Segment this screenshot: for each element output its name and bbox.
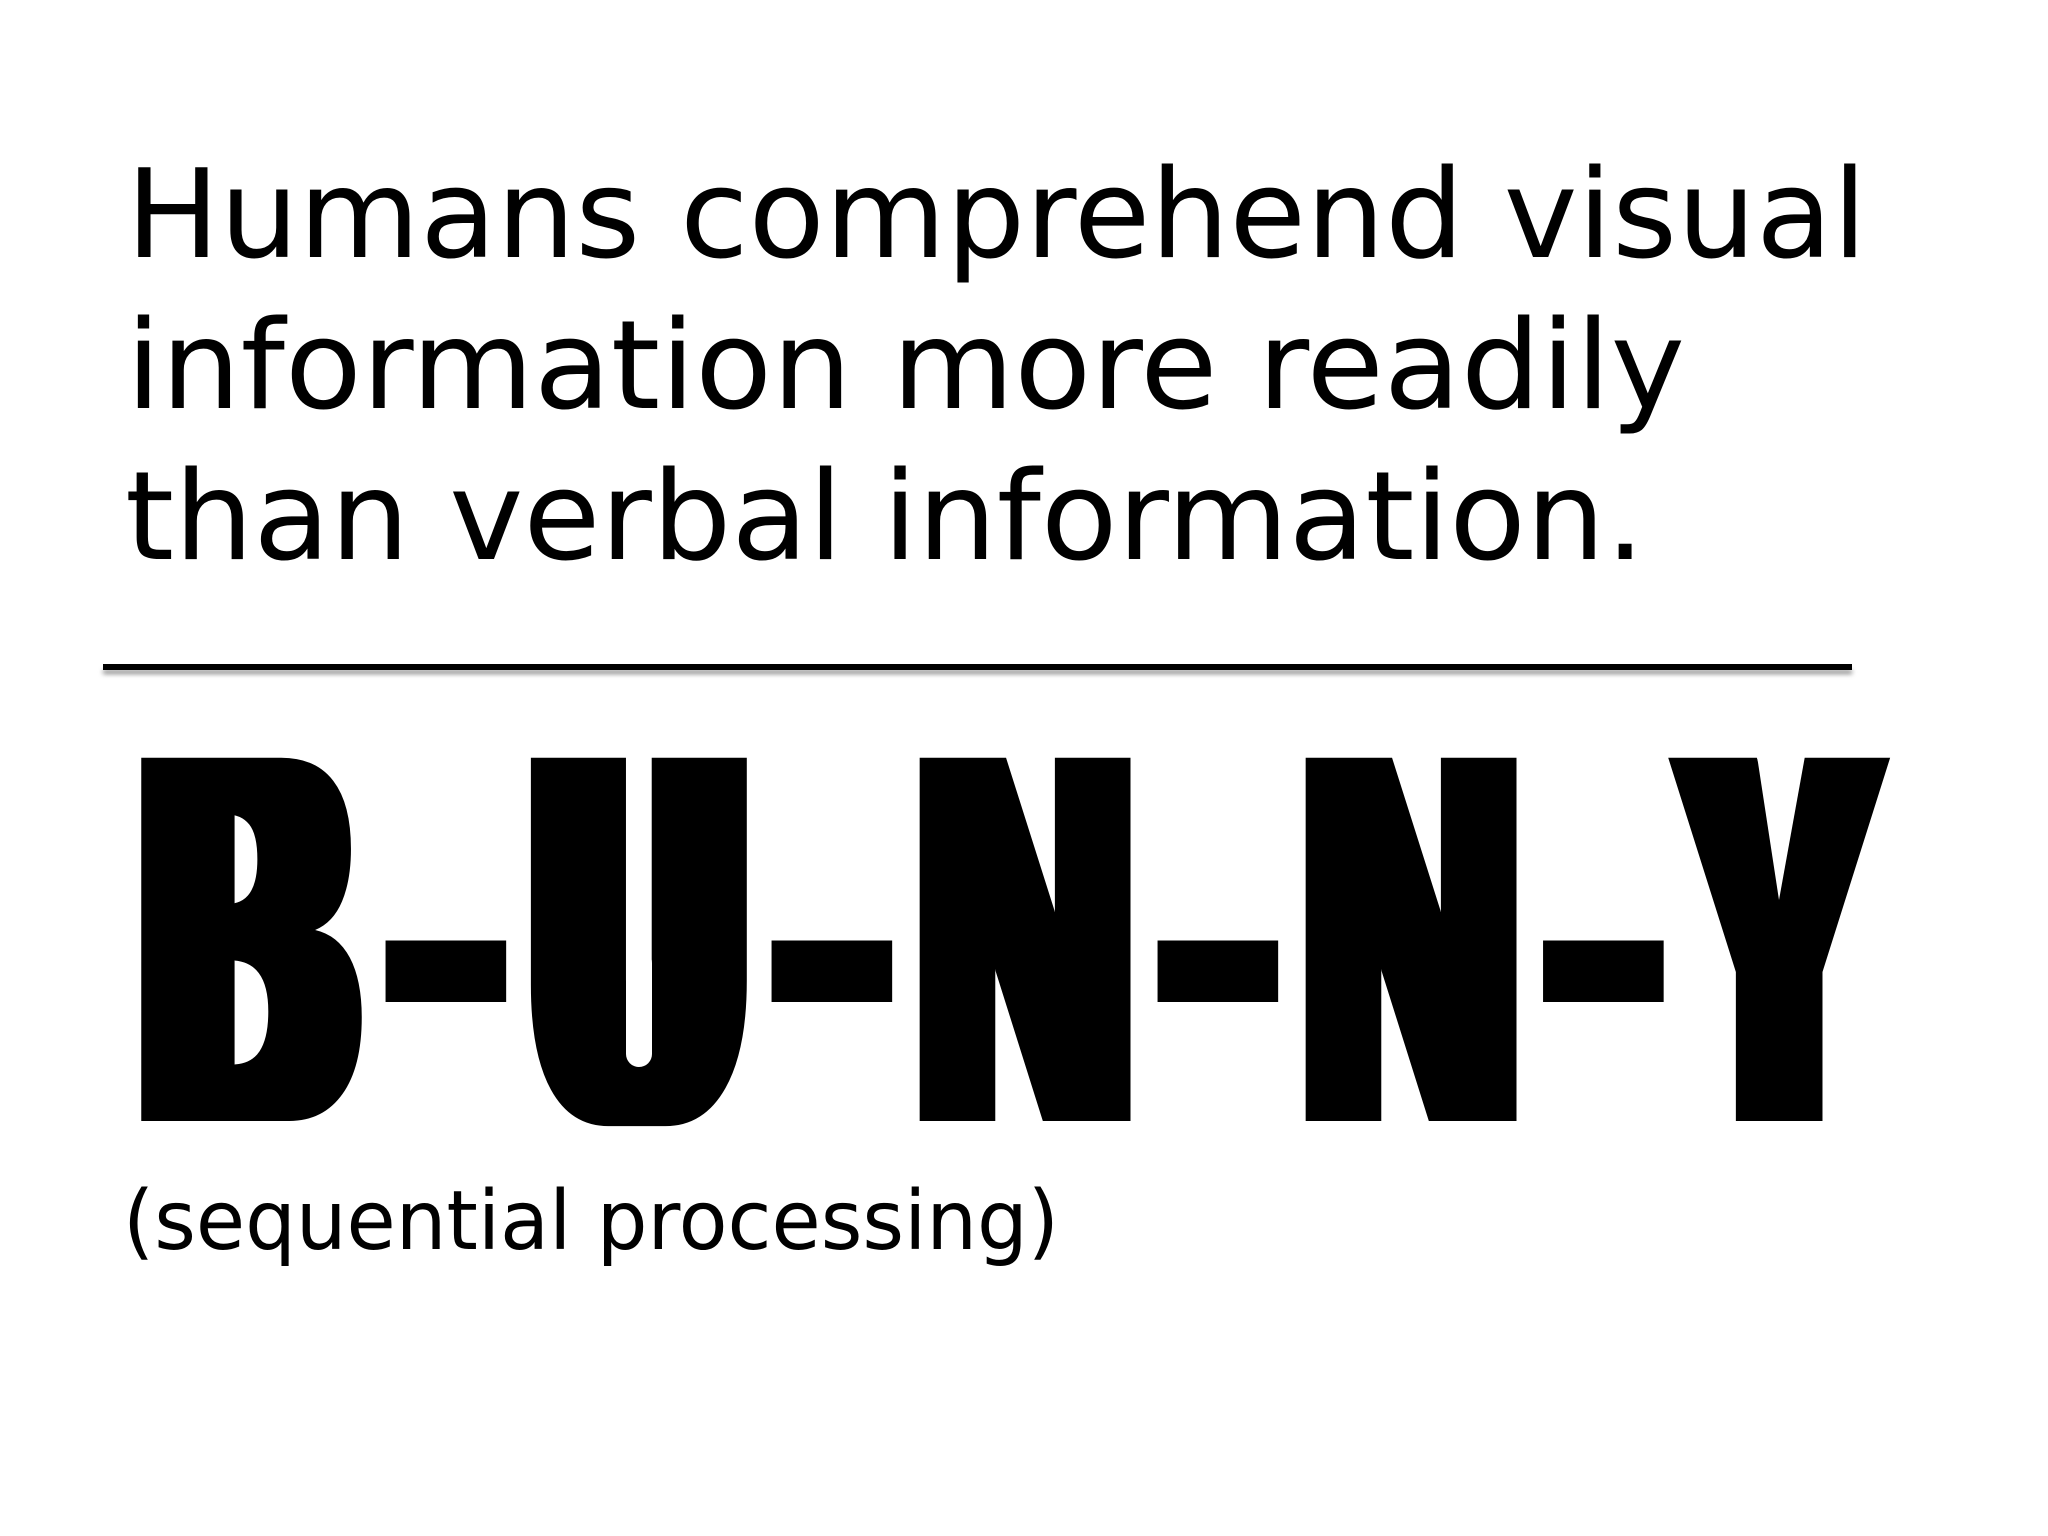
hyphen 2: - bbox=[753, 639, 911, 1215]
hyphen 3: - bbox=[1139, 639, 1297, 1215]
heading line 2: information more readily bbox=[126, 295, 1685, 438]
caption: sequential processing: (sequential processing) bbox=[123, 1174, 1059, 1269]
heading: statement about visual information bbox=[125, 144, 1867, 589]
heading line 3: than verbal information. bbox=[125, 446, 1645, 589]
divider line with soft shadow bbox=[103, 664, 1852, 674]
letter Y: Y bbox=[1687, 645, 1871, 1234]
spelled-out word: B-U-N-N-Y bbox=[150, 639, 1871, 1234]
hyphen 4: - bbox=[1524, 639, 1683, 1215]
letter B: B bbox=[150, 645, 347, 1234]
letter N: N bbox=[919, 643, 1131, 1233]
letter U: U bbox=[544, 644, 734, 1234]
heading line 1: Humans comprehend visual bbox=[126, 144, 1867, 287]
letter N: N bbox=[1305, 643, 1517, 1233]
hyphen 1: - bbox=[367, 639, 525, 1215]
